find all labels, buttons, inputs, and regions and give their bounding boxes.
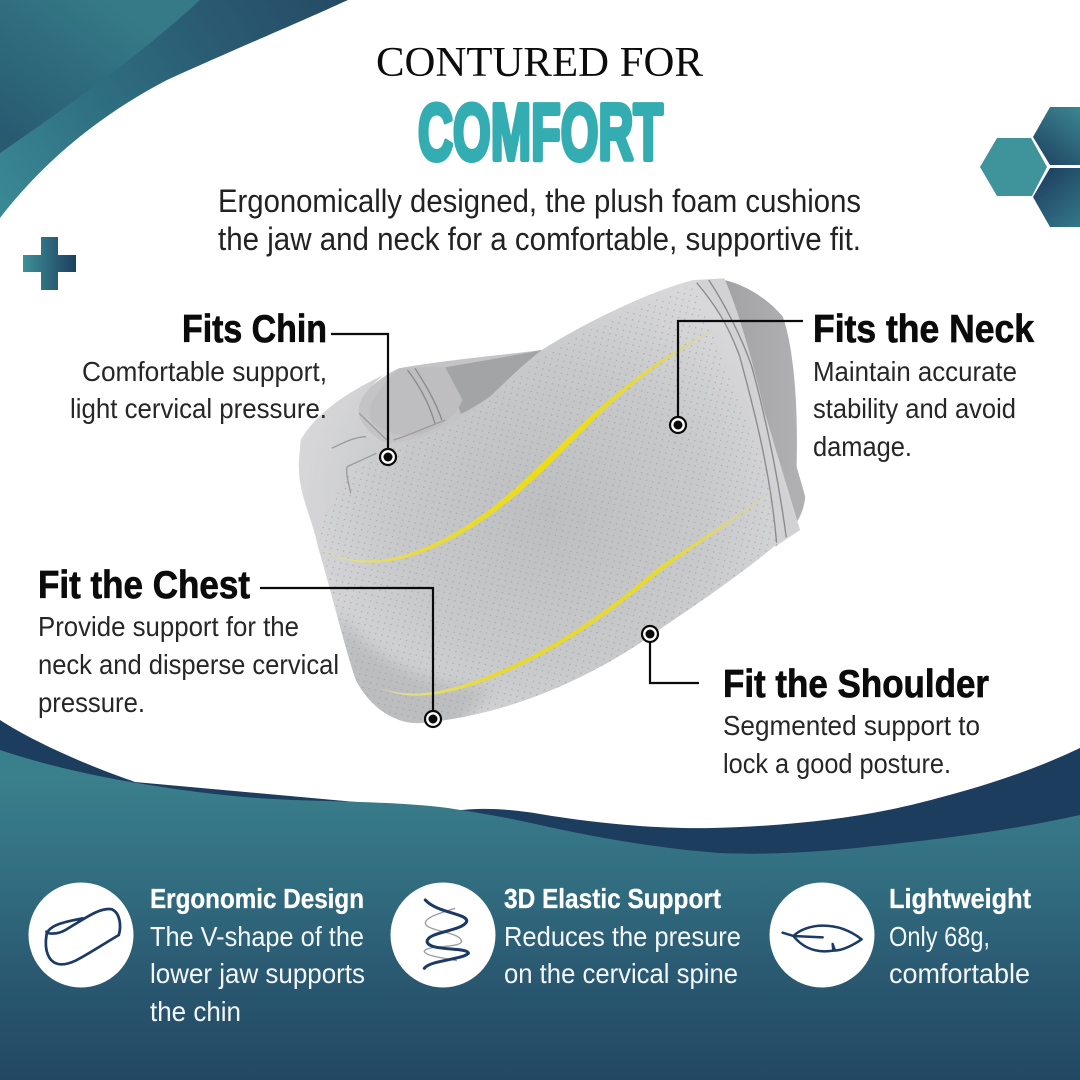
subtitle: Ergonomically designed, the plush foam cushions — [218, 183, 861, 219]
callout: fits the neck: Maintain accurate — [813, 356, 1017, 387]
icon: plus — [23, 237, 76, 290]
yellow stripe top — [321, 325, 724, 563]
top-left wave — [0, 0, 348, 218]
callout: fits the neck: Fits the Neck — [813, 308, 1034, 351]
feature: 3d elastic support: 3D Elastic Support — [504, 883, 721, 914]
feature: ergonomic design: lower jaw supports — [150, 958, 365, 989]
callout: fit the chest: Fit the Chest — [38, 564, 250, 607]
callout: fit the shoulder — [642, 626, 989, 779]
feature: 3d elastic support: Reduces the presure — [504, 921, 741, 952]
bottom waves — [0, 720, 1080, 1080]
callout: fits the neck: stability and avoid — [813, 393, 1016, 424]
callout: fit the chest: pressure. — [38, 687, 145, 718]
feature: 3d elastic support — [390, 882, 741, 989]
callout: fit the shoulder: Segmented support to — [723, 710, 980, 741]
feature: 3d elastic support: on the cervical spine — [504, 958, 738, 989]
callout: fits chin: light cervical pressure. — [70, 393, 327, 424]
icon: hexagons — [980, 107, 1080, 227]
feature: lightweight: comfortable — [889, 958, 1030, 989]
callout: fit the chest: neck and disperse cervical — [38, 649, 339, 680]
collar inner dark band — [445, 350, 542, 414]
callout: fit the shoulder: lock a good posture. — [723, 748, 951, 779]
title: contured for: CONTURED FOR — [376, 40, 703, 86]
collar back padding — [721, 279, 805, 547]
feature: ergonomic design: The V-shape of the — [150, 921, 364, 952]
subtitle: the jaw and neck for a comfortable, supportive fit. — [218, 221, 861, 257]
subtitle — [218, 183, 861, 257]
icon: dna helix — [424, 900, 468, 968]
collar right strip — [698, 278, 800, 545]
collar inner hollow — [349, 350, 542, 457]
feature: lightweight — [770, 882, 1031, 989]
callout: fits the neck — [670, 308, 1034, 462]
title: comfort: COMFORT — [418, 88, 663, 176]
collar stitching — [407, 280, 786, 543]
callout: fit the shoulder: Fit the Shoulder — [723, 663, 989, 706]
collar front face — [299, 278, 800, 723]
callout: fit the chest: Provide support for the — [38, 611, 299, 642]
callout: fits chin: Fits Chin — [182, 308, 327, 351]
callout: fits chin — [70, 308, 396, 465]
feature: ergonomic design: the chin — [150, 996, 241, 1027]
icon: collar outline — [46, 909, 120, 964]
feature: lightweight: Only 68g, — [889, 921, 990, 952]
collar lower shading — [338, 620, 485, 724]
callout: fits chin: Comfortable support, — [82, 356, 327, 387]
feature: lightweight: Lightweight — [889, 883, 1031, 914]
cervical collar — [299, 278, 805, 733]
collar chin fold — [369, 367, 463, 435]
feature: ergonomic design — [28, 882, 365, 1027]
callout: fit the chest — [38, 564, 441, 727]
callout: fits the neck: damage. — [813, 431, 912, 462]
yellow stripe bottom — [380, 487, 776, 696]
collar perforations — [318, 285, 776, 722]
icon: feather leaf — [783, 926, 862, 951]
feature: ergonomic design: Ergonomic Design — [150, 883, 364, 914]
collar crease — [332, 413, 445, 493]
